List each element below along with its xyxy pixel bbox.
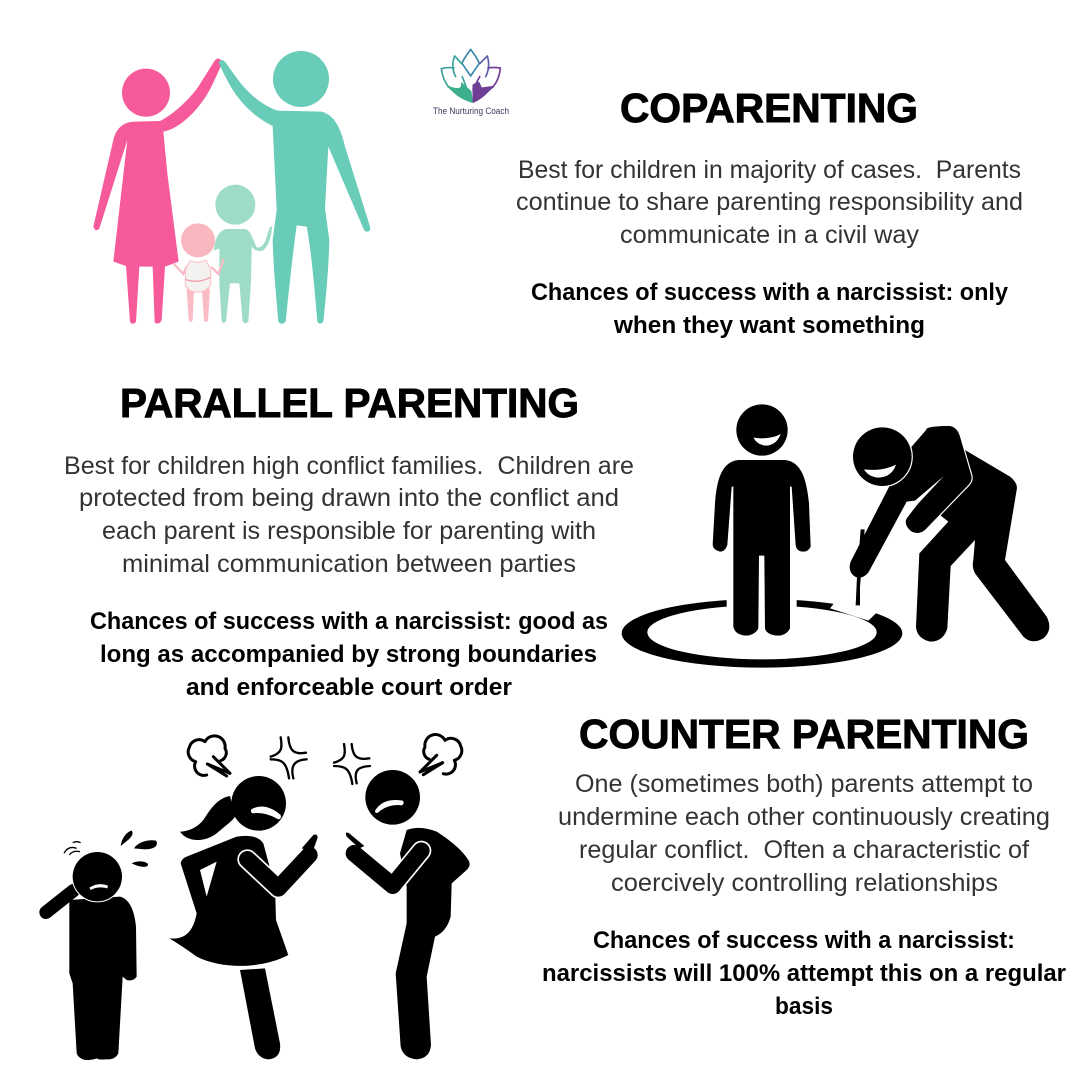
upset child figure bbox=[46, 831, 157, 1060]
success note: counter parenting bbox=[542, 927, 1066, 1020]
description: parallel parenting: each parent is responsible for parenting with bbox=[102, 517, 596, 545]
success note: coparenting: Chances of success with a narcissist: only bbox=[531, 279, 1009, 306]
heading: parallel parenting: PARALLEL PARENTING bbox=[120, 380, 579, 426]
success note: parallel parenting bbox=[90, 608, 608, 701]
logo wordmark: The Nurturing Coach bbox=[433, 106, 509, 116]
description: counter parenting: coercively controlling relationships bbox=[611, 869, 998, 897]
description: parallel parenting: protected from being drawn into the conflict and bbox=[79, 484, 619, 512]
section: parallel parenting text bbox=[64, 380, 634, 701]
icon: man's steam cloud bbox=[420, 735, 462, 775]
description: coparenting: communicate in a civil way bbox=[620, 221, 920, 249]
ground circle bbox=[622, 590, 902, 668]
success note: parallel parenting: Chances of success with a narcissist: good as bbox=[90, 608, 608, 635]
description: counter parenting: regular conflict. Often a characteristic of bbox=[579, 836, 1029, 864]
older child figure bbox=[214, 185, 272, 323]
description: counter parenting: undermine each other continuously creating bbox=[558, 803, 1050, 831]
description: coparenting bbox=[516, 156, 1023, 249]
illustration: figure drawing a circle around another figure bbox=[622, 404, 1049, 668]
description: parallel parenting: minimal communication between parties bbox=[122, 550, 576, 578]
illustration: arguing parents with upset child bbox=[46, 735, 470, 1060]
heading: counter parenting: COUNTER PARENTING bbox=[579, 711, 1029, 757]
description: parallel parenting: Best for children high conflict families. Children are bbox=[64, 452, 634, 480]
mother figure bbox=[93, 58, 222, 324]
toddler figure bbox=[174, 223, 223, 322]
success note: coparenting: when they want something bbox=[613, 312, 925, 339]
description: coparenting: continue to share parenting responsibility and bbox=[516, 188, 1023, 216]
icon: man's anger mark bbox=[334, 744, 370, 784]
angry woman figure bbox=[169, 776, 318, 1059]
icon: woman's steam cloud bbox=[188, 736, 230, 776]
success note: parallel parenting: and enforceable court order bbox=[186, 674, 512, 701]
success note: counter parenting: narcissists will 100% attempt this on a regular bbox=[542, 960, 1066, 987]
success note: counter parenting: Chances of success with a narcissist: bbox=[593, 927, 1015, 954]
father figure bbox=[219, 51, 370, 324]
success note: counter parenting: basis bbox=[775, 993, 833, 1020]
description: counter parenting bbox=[558, 770, 1050, 897]
description: counter parenting: One (sometimes both) parents attempt to bbox=[575, 770, 1033, 798]
icon: woman's anger mark bbox=[271, 737, 307, 778]
description: coparenting: Best for children in majority of cases. Parents bbox=[518, 156, 1021, 184]
success note: parallel parenting: long as accompanied by strong boundaries bbox=[100, 641, 597, 668]
section: coparenting text bbox=[516, 85, 1023, 339]
description: parallel parenting bbox=[64, 452, 634, 578]
success note: coparenting bbox=[531, 279, 1009, 339]
illustration: family under raised arms bbox=[93, 51, 370, 324]
section: counter parenting text bbox=[542, 711, 1066, 1020]
bending figure with stick bbox=[850, 426, 1049, 642]
heading: coparenting: COPARENTING bbox=[620, 85, 918, 131]
standing smiling figure bbox=[713, 404, 811, 636]
angry man figure bbox=[346, 770, 470, 1059]
logo: The Nurturing Coach bbox=[433, 49, 509, 116]
